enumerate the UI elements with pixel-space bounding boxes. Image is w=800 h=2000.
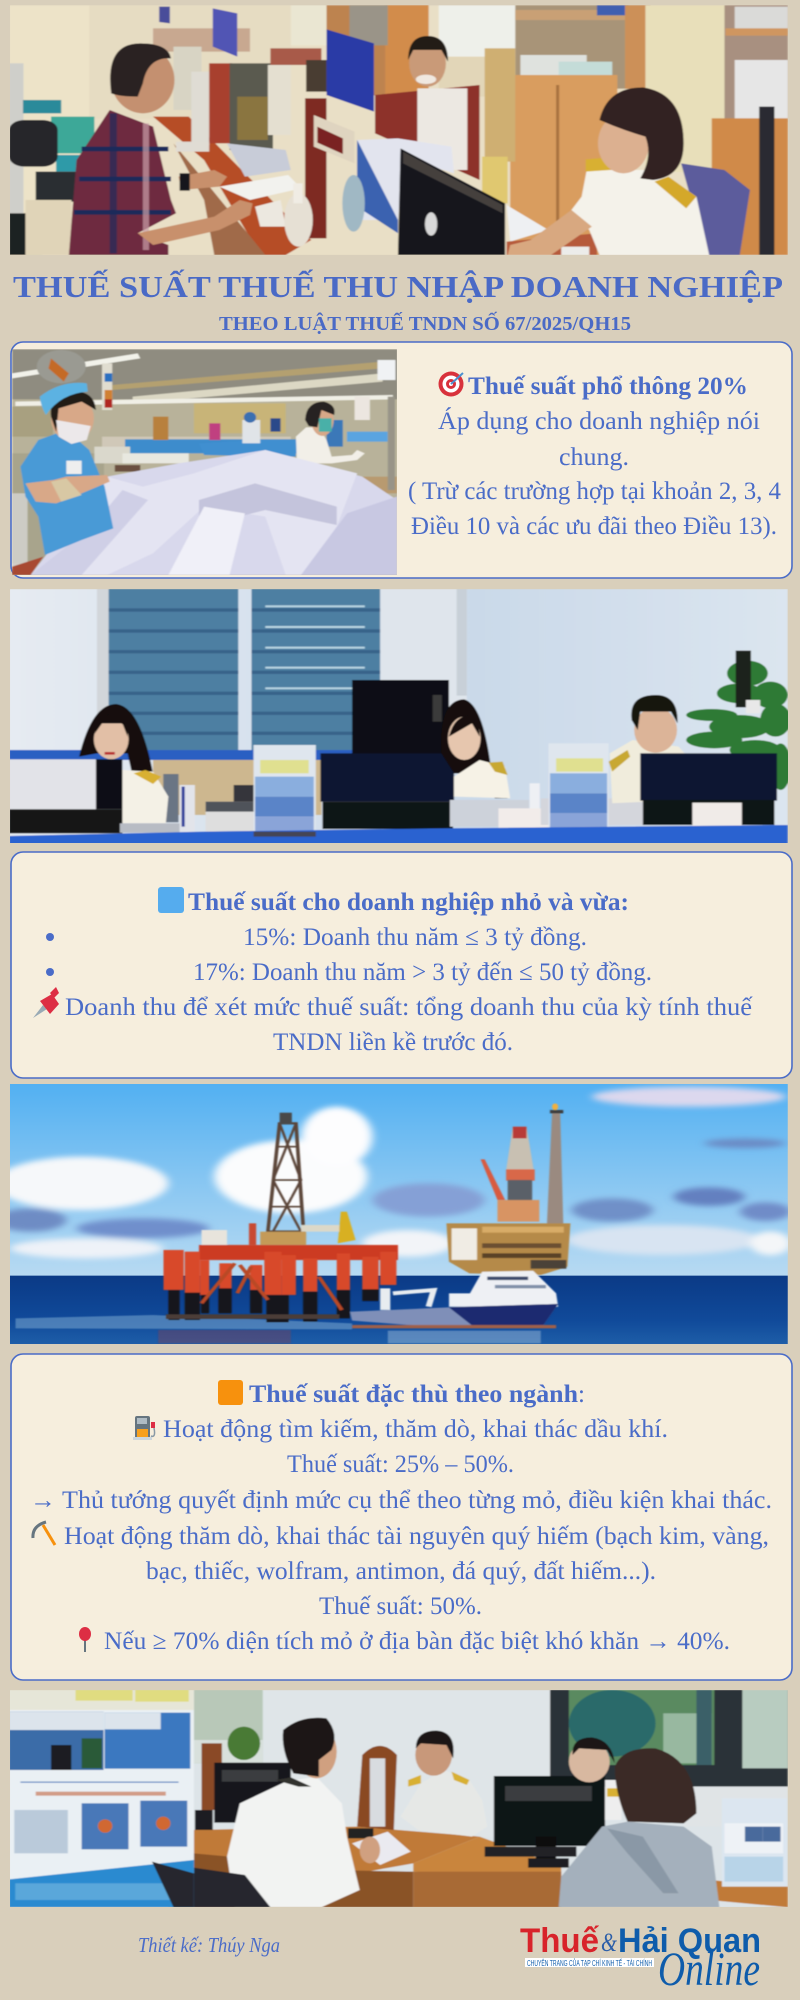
- logo: CHUYÊN TRANG CỦA TẠP CHÍ KINH TẾ - TÀI CHÍNH: [527, 1957, 652, 1968]
- oil and gas line: Hoạt động tìm kiếm, thăm dò, khai thác dầu khí.: [163, 1416, 668, 1443]
- text block: Áp dụng cho doanh nghiệp nói: [438, 407, 760, 435]
- panel: sector rates: [11, 1354, 792, 1680]
- second officer: [569, 1741, 610, 1782]
- text block: chung.: [559, 444, 629, 471]
- note text: TNDN liền kề trước đó.: [273, 1029, 513, 1056]
- icon: orange square: [218, 1380, 243, 1405]
- text block: [408, 407, 781, 540]
- bullet list: 15%: Doanh thu năm ≤ 3 tỷ đồng.: [243, 924, 587, 951]
- desks: [194, 1827, 480, 1873]
- subtitle: THEO LUẬT THUẾ TNDN SỐ 67/2025/QH15: [219, 311, 631, 335]
- panel: standard rate: [11, 342, 792, 578]
- poster: [9, 1690, 194, 1907]
- photo: tax office counter: [9, 5, 788, 255]
- photo: offshore oil rigs: [0, 1084, 791, 1345]
- icon: fuel pump: [133, 1416, 155, 1440]
- note text: [65, 994, 753, 1056]
- chair: [192, 1867, 271, 1907]
- icon: pick: [33, 1522, 55, 1545]
- oil rate: Thuế suất: 25% – 50%.: [287, 1451, 514, 1478]
- logo: Thuế: [520, 1922, 599, 1960]
- bullet list: [46, 924, 652, 986]
- monitor centre right: [494, 1776, 605, 1846]
- logo: [520, 1922, 761, 1996]
- logo: Hải Quan: [618, 1922, 761, 1960]
- photo: tax officers at desks: [9, 589, 791, 844]
- photo: garment factory: [12, 349, 397, 576]
- prime minister note: → Thủ tướng quyết định mức cụ thể theo từng mỏ, điều kiện khai thác.: [30, 1487, 772, 1514]
- logo: &: [601, 1928, 618, 1957]
- rare resources text: bạc, thiếc, wolfram, antimon, đá quý, đất hiếm...).: [146, 1558, 656, 1585]
- icon: pushpin: [33, 987, 59, 1018]
- young man: [227, 1777, 360, 1907]
- note text: Doanh thu để xét mức thuế suất: tổng doanh thu của kỳ tính thuế: [65, 994, 753, 1021]
- derrick: [268, 1123, 304, 1232]
- officer: [456, 1834, 474, 1838]
- text block: Điều 10 và các ưu đãi theo Điều 13).: [411, 513, 777, 540]
- photo: taxpayer consultation: [9, 1690, 788, 1907]
- panel: SME rate: [11, 852, 792, 1078]
- leaflet right: [722, 1798, 787, 1887]
- difficult area note: Nếu ≥ 70% diện tích mỏ ở địa bàn đặc biệt khó khăn → 40%.: [104, 1628, 730, 1655]
- designer credit: Thiết kế: Thúy Nga: [138, 1933, 280, 1957]
- heading: Thuế suất đặc thù theo ngành: [249, 1381, 578, 1408]
- text block: ( Trừ các trường hợp tại khoản 2, 3, 4: [408, 478, 781, 505]
- woman in grey: [559, 1822, 719, 1907]
- rig deck and legs: [199, 1245, 398, 1260]
- supply ship: [449, 1271, 558, 1307]
- wooden chair: [357, 1746, 397, 1830]
- icon: blue square: [158, 887, 184, 913]
- icon: target: [438, 372, 464, 396]
- rare resources text: Hoạt động thăm dò, khai thác tài nguyên quý hiếm (bạch kim, vàng,: [64, 1523, 769, 1550]
- logo: Online: [658, 1943, 760, 1996]
- platform: [506, 1127, 534, 1170]
- title: THUẾ SUẤT THUẾ THU NHẬP DOANH NGHIỆP: [13, 268, 783, 304]
- heading: :: [578, 1381, 585, 1408]
- heading with target icon: Thuế suất phổ thông 20%: [468, 373, 748, 400]
- icon: round pushpin: [79, 1627, 91, 1652]
- heading: Thuế suất cho doanh nghiệp nhỏ và vừa:: [188, 889, 629, 916]
- bullet list: 17%: Doanh thu năm > 3 tỷ đến ≤ 50 tỷ đồng.: [193, 959, 652, 986]
- rare resources rate: Thuế suất: 50%.: [319, 1593, 482, 1620]
- rare resources text: [64, 1523, 769, 1585]
